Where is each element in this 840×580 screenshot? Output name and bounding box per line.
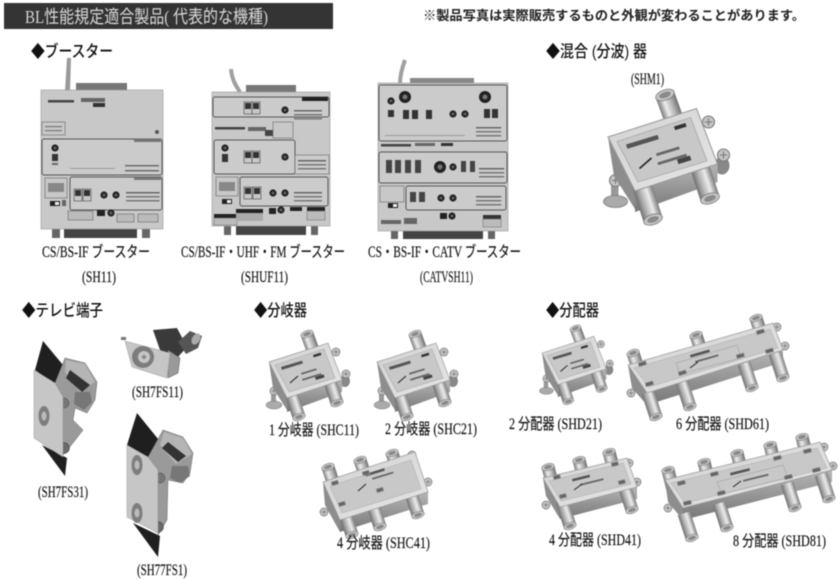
device: CATVSH11 booster xyxy=(378,60,508,239)
caption: SHD61: 6 分配器 (SHD61) xyxy=(676,415,769,433)
device: SHD41 splitter xyxy=(541,447,641,531)
device: SHC21 tap-off xyxy=(374,329,458,422)
heading: tap-off: ◆分岐器 xyxy=(254,301,307,320)
caption: SH11 xyxy=(42,242,150,286)
caption: SHD21: 2 分配器 (SHD21) xyxy=(509,415,602,433)
caption: SH11: (SH11) xyxy=(82,269,116,286)
caption: SH11: CS/BS-IF ブースター xyxy=(42,242,150,261)
caption: SH77FS1: (SH77FS1) xyxy=(137,562,187,579)
caption: SHUF11: CS/BS-IF・UHF・FM ブースター xyxy=(181,242,345,261)
device: SHD21 splitter xyxy=(539,324,613,406)
caption: CATVSH11: (CATVSH11) xyxy=(420,269,473,286)
caption: SHUF11 xyxy=(181,242,345,286)
device: SHD61 splitter xyxy=(626,313,790,422)
caption: SH7FS11: (SH7FS11) xyxy=(132,384,183,401)
device: SHC41 tap-off xyxy=(320,448,432,540)
caption: SHC11: 1 分岐器 (SHC11) xyxy=(269,421,359,439)
caption: SHD41: 4 分配器 (SHD41) xyxy=(549,531,641,549)
caption: CATVSH11 xyxy=(368,242,521,286)
device: SHC11 tap-off xyxy=(266,329,350,422)
heading: TV outlets: ◆テレビ端子 xyxy=(22,301,103,320)
caption: SHM1: (SHM1) xyxy=(631,71,664,88)
disclaimer note: ※製品写真は実際販売するものと外観が変わることがあります。 xyxy=(423,7,805,23)
device: SH7FS11 outlet xyxy=(121,328,202,378)
heading: splitters: ◆分配器 xyxy=(546,301,599,320)
device: SH7FS31 outlet xyxy=(34,341,97,476)
title bar xyxy=(4,3,333,29)
device: SH11 booster xyxy=(41,58,163,238)
title bar: BL性能規定適合製品( 代表的な機種) xyxy=(25,7,268,28)
heading: boosters: ◆ブースター xyxy=(31,41,113,61)
device: SHM1 mixer xyxy=(604,87,730,227)
heading: mixer: ◆混合 (分波) 器 xyxy=(546,42,647,61)
caption: SHC41: 4 分岐器 (SHC41) xyxy=(337,534,430,552)
device: SHD81 splitter xyxy=(661,432,837,543)
caption: SH7FS31: (SH7FS31) xyxy=(38,484,88,501)
device: SH77FS1 outlet xyxy=(127,413,193,557)
caption: SHUF11: (SHUF11) xyxy=(241,269,288,286)
caption: SHC21: 2 分岐器 (SHC21) xyxy=(385,420,477,438)
caption: CATVSH11: CS・BS-IF・CATV ブースター xyxy=(368,242,521,261)
device: SHUF11 booster xyxy=(212,69,330,235)
